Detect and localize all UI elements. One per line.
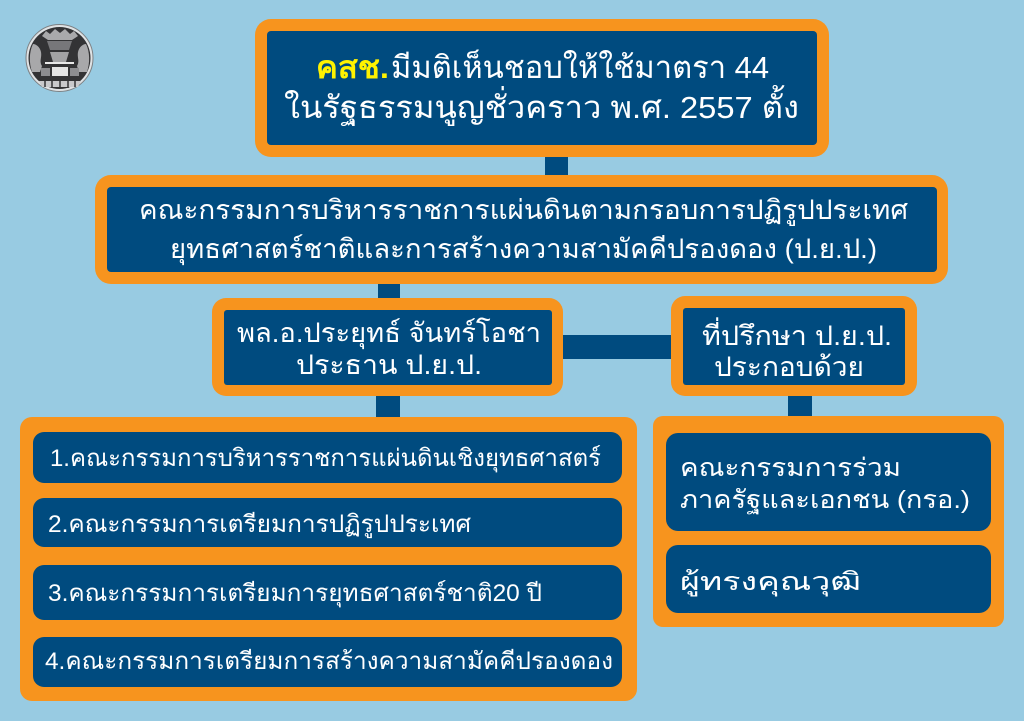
- sub-committee 4: 4.คณะกรรมการเตรียมการสร้างความสามัคคีปรองดอง: [45, 648, 613, 675]
- advisors line 2: ประกอบด้วย: [714, 352, 864, 382]
- connector: main committee to chairman: [378, 282, 400, 300]
- sub-committee 3: [33, 565, 622, 620]
- sub-committee 1: 1.คณะกรรมการบริหารราชการแผ่นดินเชิงยุทธศาสตร์: [50, 444, 601, 473]
- connector: top box to main committee: [545, 155, 568, 177]
- icon: government emblem seal: [26, 24, 93, 92]
- panel: advisor members: [653, 416, 1004, 627]
- committee name line 1: คณะกรรมการบริหารราชการแผ่นดินตามกรอบการปฏิรูปประเทศ: [139, 195, 908, 226]
- chairman name: พล.อ.ประยุทธ์ จันทร์โอชา: [237, 317, 541, 350]
- committee name line 2: ยุทธศาสตร์ชาติและการสร้างความสามัคคีปรองดอง (ป.ย.ป.): [170, 233, 877, 266]
- panel: sub-committees: [20, 417, 637, 701]
- panel: NCPO resolution heading: [255, 19, 829, 157]
- heading line 1: มีมติเห็นชอบให้ใช้มาตรา 44: [391, 49, 769, 85]
- member: experts: [666, 545, 991, 613]
- panel: advisors: [671, 296, 917, 396]
- panel: chairman: [212, 298, 563, 396]
- member: joint public-private committee: [666, 433, 991, 531]
- connector: chairman to advisors: [561, 335, 673, 359]
- member: joint public-private committee: ภาครัฐและเอกชน (กรอ.): [680, 486, 970, 514]
- connector: advisors to members: [788, 394, 812, 418]
- sub-committee 1: [33, 432, 622, 483]
- connector: chairman to sub-committees: [376, 394, 400, 419]
- advisors line 1: ที่ปรึกษา ป.ย.ป.: [702, 317, 892, 351]
- panel: national administration committee: [95, 175, 948, 284]
- heading accent: NCPO: คสช.: [316, 50, 389, 85]
- sub-committee 3: 3.คณะกรรมการเตรียมการยุทธศาสตร์ชาติ20 ปี: [48, 579, 542, 608]
- chairman title: ประธาน ป.ย.ป.: [296, 350, 482, 380]
- member: joint public-private committee: คณะกรรมการร่วม: [680, 454, 901, 482]
- sub-committee 4: [33, 637, 622, 687]
- sub-committee 2: 2.คณะกรรมการเตรียมการปฏิรูปประเทศ: [48, 511, 471, 539]
- heading line 2: ในรัฐธรรมนูญชั่วคราว พ.ศ. 2557 ตั้ง: [284, 85, 799, 126]
- sub-committee 2: [33, 498, 622, 547]
- member: experts: ผู้ทรงคุณวุฒิ: [680, 568, 861, 597]
